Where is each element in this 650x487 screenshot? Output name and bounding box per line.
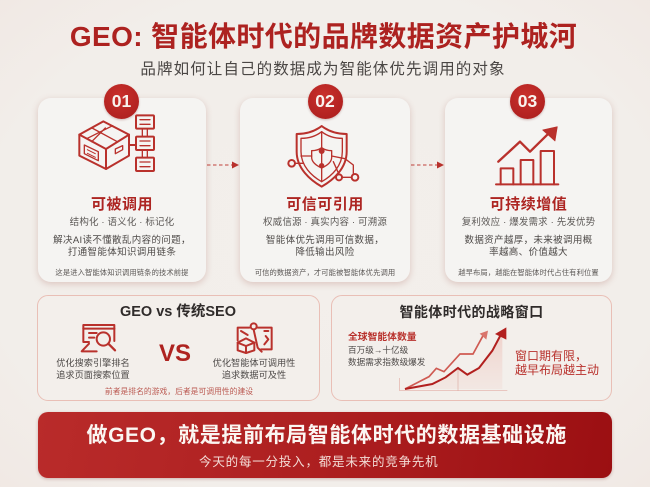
footnote: 可信的数据资产，才可能被智能体优先调用 [255,268,395,277]
badge 02 [308,84,342,119]
stat description [348,345,425,366]
icon: agent data boxes [236,322,273,354]
stat heading: 全球智能体数量 [348,332,417,343]
badge 03: 03 [518,91,537,111]
right description: 追求数据可及性 [222,370,286,380]
card heading: 可被调用 [91,196,153,213]
growth chart [399,327,508,391]
panel: 可信可引用 [240,98,410,282]
description: 打通智能体知识调用链条 [68,247,176,258]
panel: 智能体时代的战略窗口 [331,295,612,401]
banner subline: 今天的每一分投入，都是未来的竞争先机 [199,455,438,469]
panel: GEO vs 传统SEO [37,295,320,401]
icon: growth bars with arrow [495,126,560,186]
arrow: step 1 to step 2 [207,162,239,168]
icon: search engine [80,324,116,352]
left description [56,358,130,380]
footnote: 这是进入智能体知识调用链条的技术前提 [55,268,189,277]
comparison note: 前者是排名的游戏，后者是可调用性的建设 [105,387,253,396]
badge 03 [510,84,545,119]
panel: 可持续增值 [445,98,612,282]
description: 解决AI读不懂散乱内容的问题， [53,235,191,246]
arrow: step 2 to step 3 [411,162,444,168]
title: GEO: 智能体时代的品牌数据资产护城河 [70,21,577,52]
description [53,234,191,258]
stat description: 数据需求指数级爆发 [348,356,425,366]
description: 数据资产越厚，未来被调用概 [464,235,593,246]
panel: closing banner [38,412,612,478]
VS mark: VS [159,340,191,367]
stat description: 百万级→十亿级 [348,345,408,355]
window callout: 窗口期有限， [515,349,587,363]
icon: shield with nodes [287,125,360,188]
description: 智能体优先调用可信数据， [266,235,384,246]
card heading: 可持续增值 [490,196,567,213]
panel heading: 智能体时代的战略窗口 [400,304,544,320]
keywords: 权威信源 · 真实内容 · 可溯源 [263,217,387,228]
keywords: 复利效应 · 爆发需求 · 先发优势 [462,217,595,228]
footnote: 越早布局，越能在智能体时代占住有利位置 [458,268,599,277]
panel: 可被调用 [38,98,206,282]
right description [213,358,295,380]
left description: 追求页面搜索位置 [56,370,130,380]
subtitle: 品牌如何让自己的数据成为智能体优先调用的对象 [140,61,506,78]
card heading: 可信可引用 [286,196,364,213]
badge 02: 02 [315,91,335,111]
window callout [515,349,599,377]
panel heading: GEO vs 传统SEO [120,304,236,320]
badge 01: 01 [112,91,131,111]
description: 降低输出风险 [295,247,355,258]
right description: 优化智能体可调用性 [213,358,295,368]
icon: data box with structured nodes [78,114,155,172]
description [464,234,593,258]
window callout: 越早布局越主动 [515,363,599,377]
keywords: 结构化 · 语义化 · 标记化 [70,217,174,228]
left description: 优化搜索引擎排名 [56,358,130,368]
description [266,234,384,258]
description: 率越高、价值越大 [489,247,568,258]
banner heading: 做GEO，就是提前布局智能体时代的数据基础设施 [86,424,567,447]
badge 01 [104,84,139,119]
